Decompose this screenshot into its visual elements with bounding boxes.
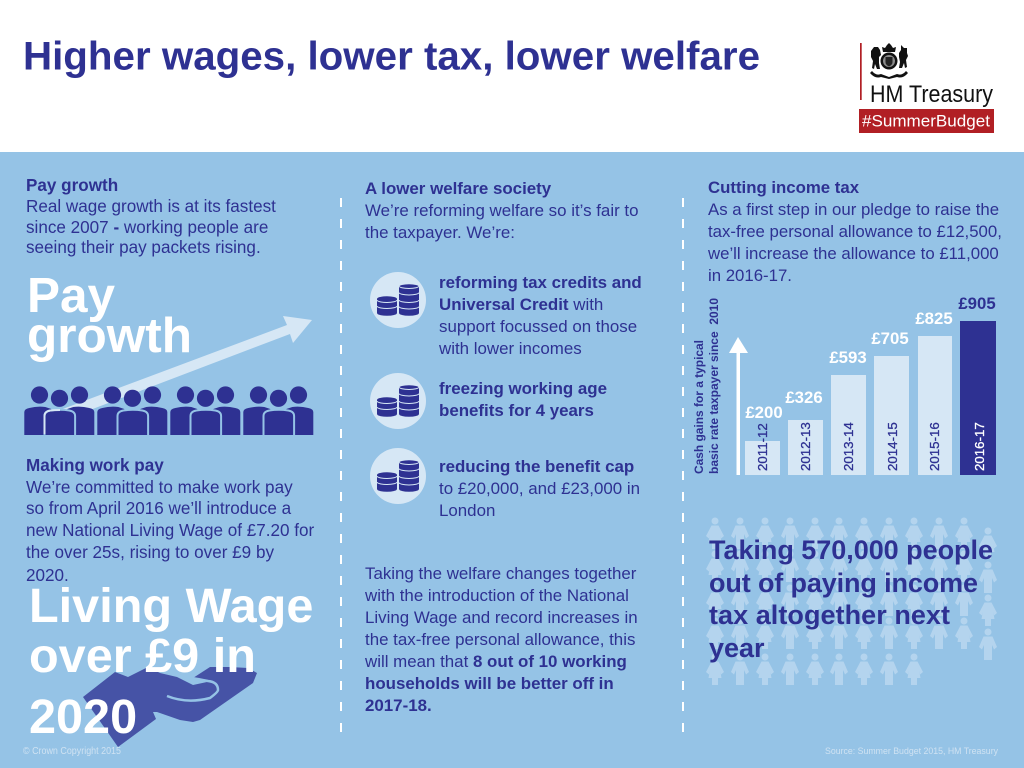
text: income tax body: tax-free personal allowance to £12,500, [708,222,1002,241]
axis label: Cash gains for a typical [692,340,706,474]
axis label [692,298,721,474]
heading: cutting income tax: Cutting income tax [708,178,860,197]
icon: hand [83,667,257,747]
header band [0,0,1024,152]
text: making work pay body: so from April 2016 we’ll introduce a [26,499,292,518]
bar year labels [755,422,987,471]
footer: copyright: © Crown Copyright 2015 [23,746,121,757]
text: freezing benefits [439,379,607,420]
big label: pay growth: Pay [27,268,116,323]
text: summary: Taking the welfare changes together [365,564,637,583]
text: making work pay body: We’re committed to make work pay [26,478,293,497]
text: intro: the taxpayer. We’re: [365,223,515,242]
icon: coins 3 [370,448,426,504]
text: pay growth body: seeing their pay packets rising. [26,238,261,257]
big label: pay growth [27,268,192,363]
column dividers [341,198,683,733]
logo: HM Treasury [859,43,994,133]
callout: 570,000 people: out of paying income [709,568,978,598]
axis label: basic rate taxpayer since 2010 [707,298,721,474]
text: freezing benefits: benefits for 4 years [439,401,594,420]
icon: workers [23,386,314,437]
text: reforming tax credits [438,273,642,358]
text: income tax body [707,200,1002,285]
text: making work pay body: 2020. [26,566,69,585]
logotype: HM Treasury [870,81,993,108]
big label: pay growth: growth [27,308,192,363]
text: pay growth body [26,197,276,257]
bar year labels: 2014-15 [885,422,900,471]
heading: lower welfare: A lower welfare society [365,179,552,198]
big label: living wage: 2020 [29,690,137,744]
big label: living wage: Living Wage [29,579,313,633]
text: reforming tax credits: Universal Credit with [439,295,603,314]
icon: coins 1 [370,272,426,328]
text: benefit cap: to £20,000, and £23,000 in [439,479,640,498]
footer: source: Source: Summer Budget 2015, HM Treasury [825,746,998,757]
bar year labels: 2012-13 [798,422,813,471]
text: reforming tax credits: with lower incomes [438,339,582,358]
bar value labels: £200 [745,403,783,422]
text: summary: with the introduction of the National [364,586,629,605]
text: intro: We’re reforming welfare so it’s fair to [365,201,638,220]
callout: 570,000 people [709,535,993,663]
bar year labels: 2013-14 [841,422,856,471]
text: summary: will mean that 8 out of 10 working [364,652,627,671]
text: freezing benefits: freezing working age [439,379,607,398]
bar value labels: £825 [915,309,953,328]
bars [745,321,996,475]
text: income tax body: we’ll increase the allowance to £11,000 [707,244,999,263]
panel: lower welfare society [364,179,642,715]
bar value labels: £326 [785,388,823,407]
text: benefit cap [439,457,640,520]
bar value labels: £905 [958,294,996,313]
icon: coins 2 [370,373,426,429]
text: benefit cap: reducing the benefit cap [439,457,634,476]
icon: crowd of people [706,518,997,685]
callout: 570,000 people: Taking 570,000 people [709,535,993,565]
big label: living wage: over £9 in [29,629,256,683]
axis arrow [729,337,748,475]
text: reforming tax credits: support focussed on those [439,317,637,336]
text: summary: households will be better off in [365,674,614,693]
bar value labels: £705 [871,329,909,348]
bar chart: cash gains [692,294,996,475]
panel: making work pay [26,456,315,747]
bar value labels [745,294,996,422]
bar value labels: £593 [829,348,867,367]
text: summary: 2017-18. [365,696,432,715]
text: summary: the tax-free personal allowance, this [365,630,635,649]
heading: pay growth: Pay growth [26,176,118,195]
text: making work pay body [26,478,315,585]
panel: cutting income tax [692,178,1002,685]
bar year labels: 2016-17 [972,422,987,471]
bar year labels: 2011-12 [755,423,770,471]
text: summary: Living Wage and record increases in [365,608,638,627]
arrow: rising pay [60,316,312,410]
text: making work pay body: the over 25s, rising to over £9 by [26,543,274,562]
icon: royal crest [870,43,908,79]
callout: 570,000 people: tax altogether next [709,600,950,630]
panel: pay growth [23,176,314,437]
text: income tax body: in 2016-17. [708,266,792,285]
bar year labels: 2015-16 [927,422,942,471]
text: income tax body: As a first step in our pledge to raise the [708,200,999,219]
title: Higher wages, lower tax, lower welfare [23,34,760,78]
text: reforming tax credits: reforming tax credits and [439,273,642,292]
text: pay growth body: since 2007 - working people are [26,218,268,237]
text: pay growth body: Real wage growth is at its fastest [26,197,276,216]
callout: 570,000 people: year [709,633,765,663]
text: benefit cap: London [439,501,495,520]
text: making work pay body: new National Living Wage of £7.20 for [26,521,315,540]
big label: living wage [29,579,313,744]
heading: making work pay: Making work pay [26,456,164,475]
text: summary [364,564,638,715]
text: intro [365,201,638,242]
hashtag badge: #SummerBudget [862,112,990,130]
